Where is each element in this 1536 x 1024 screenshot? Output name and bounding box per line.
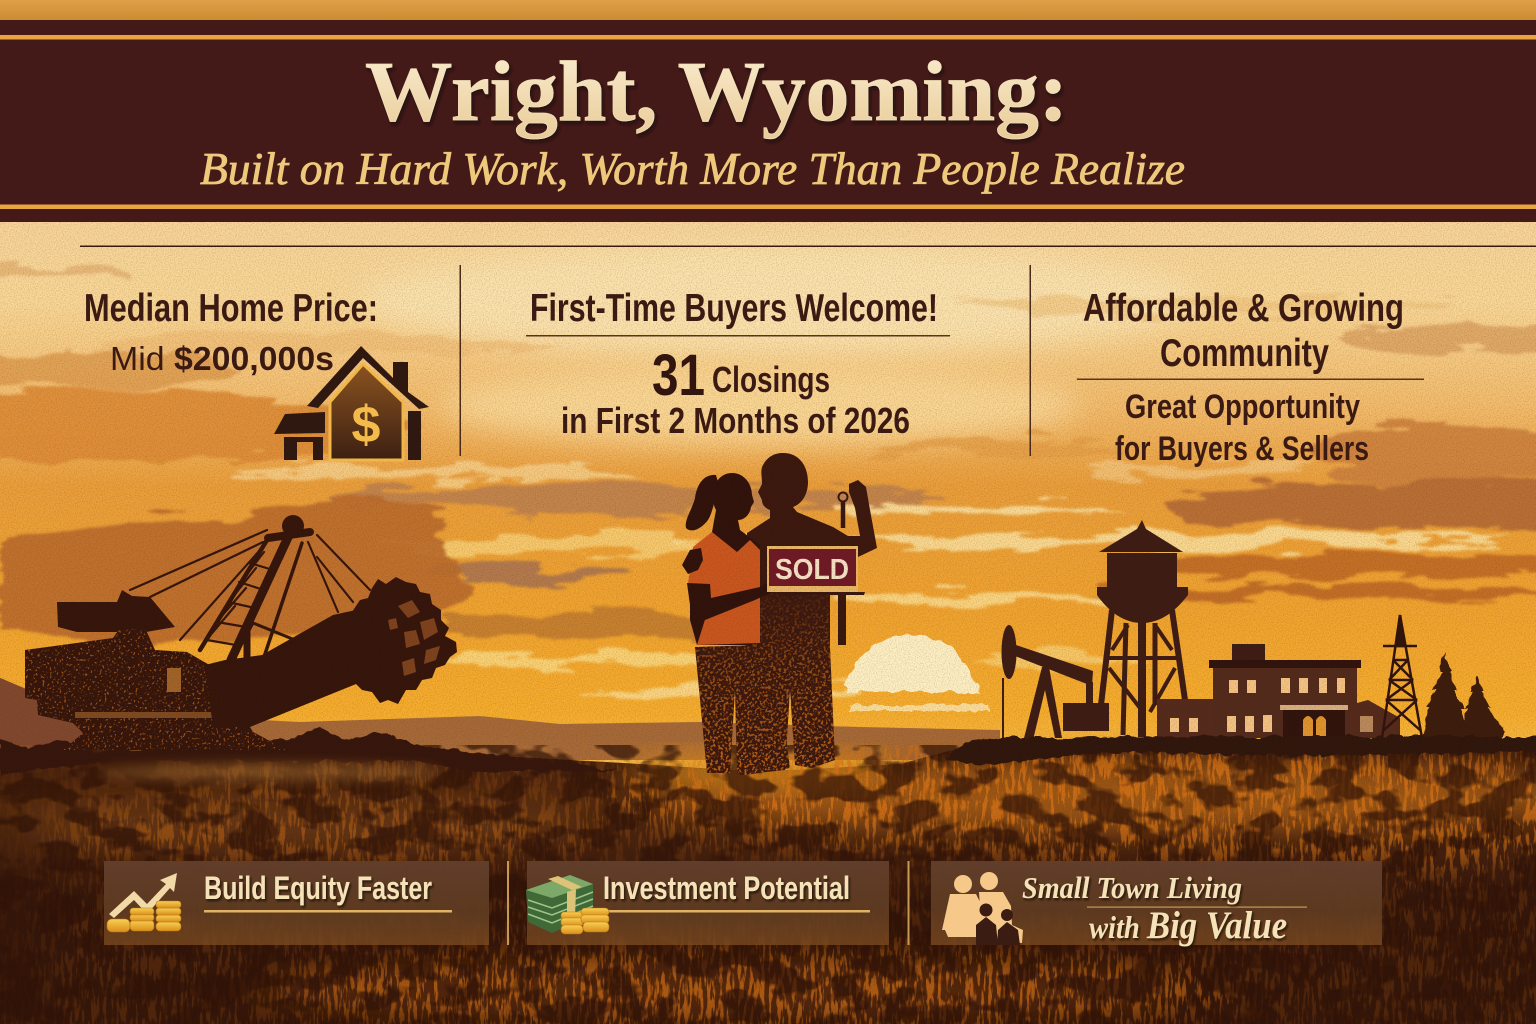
icon: cash stack with coins <box>526 875 609 934</box>
icon: house with dollar sign <box>274 346 429 460</box>
caption: great opportunity: for Buyers & Sellers <box>1115 430 1369 468</box>
pine trees <box>1422 653 1506 740</box>
excavator house <box>25 628 287 750</box>
caption: first 2 months of 2026: in First 2 Months of 2026 <box>561 400 910 441</box>
label: small town living: Small Town Living <box>1022 870 1242 905</box>
woman's orange shirt <box>688 532 760 645</box>
distant mountains <box>0 678 1000 760</box>
woman <box>690 473 760 645</box>
caption: great opportunity <box>1115 388 1369 468</box>
brick building <box>1157 644 1400 738</box>
caption: great opportunity: Great Opportunity <box>1125 388 1360 426</box>
stat column: median home price <box>84 287 429 460</box>
excavator boom <box>205 610 366 727</box>
sun <box>846 634 990 711</box>
overall watercolor grain <box>0 222 1536 1024</box>
sold sign <box>767 546 865 645</box>
subtitle: Built on Hard Work, Worth More Than People Realize <box>200 144 1185 194</box>
mast lattice <box>130 530 370 668</box>
label: with big value: with Big Value <box>1089 904 1287 947</box>
sky background <box>0 200 1536 770</box>
icon: family silhouette <box>942 872 1023 945</box>
keys <box>838 492 848 528</box>
icon: house with dollar sign: $ <box>352 396 381 454</box>
woman's legs <box>695 645 790 775</box>
excavator cab <box>57 590 175 632</box>
column divider <box>507 861 509 945</box>
sold sign: SOLD <box>775 554 849 586</box>
oil pumpjack <box>1002 625 1109 742</box>
excavator silhouette <box>25 515 457 750</box>
column divider <box>908 861 910 945</box>
stats top rule <box>80 246 1536 247</box>
title: Wright, Wyoming: <box>365 43 1068 139</box>
woman's hand on shoulder <box>682 548 703 574</box>
number: 31 closings <box>652 343 830 408</box>
bucket wheel <box>330 577 457 704</box>
town skyline <box>945 520 1536 766</box>
heading: affordable and growing community: Affordable & Growing <box>1083 287 1404 330</box>
ground: prairie grass <box>0 728 1536 1024</box>
label: Investment Potential <box>603 870 850 906</box>
benefit panel: investment potential <box>526 861 889 945</box>
water tower <box>1097 520 1188 737</box>
value: mid 200,000s: Mid $200,000s <box>110 340 334 377</box>
column divider <box>460 265 461 456</box>
ponytail <box>686 475 718 530</box>
woman's arm <box>687 578 777 620</box>
man <box>740 453 877 775</box>
heading: median home price: Median Home Price: <box>84 287 378 330</box>
header banner <box>0 0 1536 222</box>
heading: affordable and growing community: Community <box>1160 332 1329 375</box>
number: 31 closings: Closings <box>712 359 830 400</box>
benefit panel: small town living <box>931 861 1382 947</box>
number: 31 closings: 31 <box>652 343 705 408</box>
benefit panel: build equity faster <box>104 861 489 945</box>
foreground bushes <box>945 736 1536 766</box>
stat column: affordable community <box>1077 287 1424 468</box>
column divider <box>1030 265 1031 456</box>
label: Build Equity Faster <box>204 870 432 906</box>
oil derrick <box>1382 615 1422 738</box>
mast head pulley <box>282 515 304 537</box>
heading: affordable and growing community <box>1083 287 1404 375</box>
leg texture <box>696 592 835 775</box>
heading: first-time buyers welcome: First-Time Buyers Welcome! <box>530 287 938 330</box>
stat column: first-time buyers <box>526 287 950 441</box>
couple silhouette <box>680 453 880 780</box>
icon: rising arrow with coins <box>107 873 181 932</box>
